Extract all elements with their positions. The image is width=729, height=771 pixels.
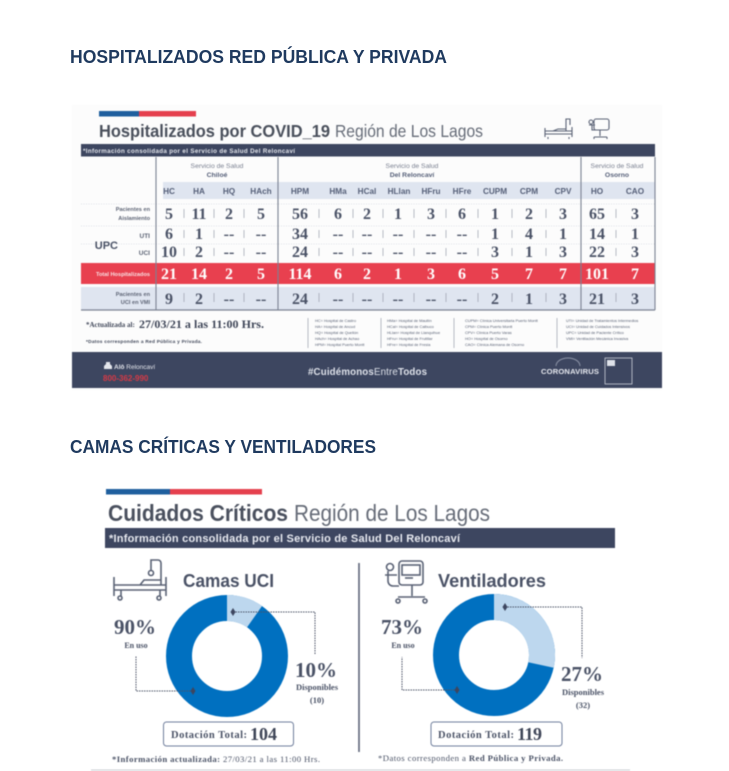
legend: HMa= Hospital de Maullín (387, 318, 432, 323)
values: UTI: -- (333, 226, 343, 243)
legend: HPM= Hospital Puerto Montt (315, 342, 365, 347)
values: UTI: -- (393, 226, 403, 243)
values: UCI: 3 (631, 244, 639, 261)
footer band: Alô Reloncaví (114, 364, 155, 371)
stat: 10% disponibles: (10) (310, 695, 324, 705)
legend: UCI= Unidad de Cuidados Intensivos (566, 324, 630, 329)
row labels: Pacientes en (116, 207, 151, 213)
service headers (191, 163, 644, 179)
column headers: HC (163, 187, 175, 196)
VMI band (81, 287, 655, 310)
stat: 90% en uso: 90% (114, 615, 156, 639)
values: UCI en VMI: -- (256, 291, 266, 308)
column headers: HMa (329, 187, 347, 196)
values: UCI en VMI: 21 (589, 291, 605, 308)
row labels: UCI en VMI (121, 300, 150, 306)
legend: HO= Hospital de Osorno (465, 336, 508, 341)
values: UCI en VMI: -- (333, 291, 343, 308)
values: UCI: 3 (559, 244, 567, 261)
values: pacientes en aislamiento: 3 (559, 206, 567, 223)
values: pacientes en aislamiento: 3 (631, 206, 639, 223)
values: total hospitalizados: 114 (288, 266, 312, 283)
values: UTI: 4 (525, 226, 533, 243)
legend: CUPM= Clínica Universitaria Puerto Montt (465, 318, 539, 323)
stat: 90% en uso: En uso (124, 641, 148, 650)
icon: bed (114, 560, 166, 600)
stat: 27% disponibles (561, 662, 605, 710)
panel title: Hospitalizados por COVID_19Región de Los Lagos (99, 121, 483, 141)
panel title: Cuidados CríticosRegión de Los Lagos (108, 500, 490, 526)
info bar: *Información consolidada por el Servicio de Salud Del Reloncaví (109, 533, 461, 545)
flag stripe (106, 489, 262, 494)
values: UCI (161, 244, 639, 261)
heading: camas UCI: Camas UCI (183, 571, 274, 591)
values: UTI: -- (457, 226, 467, 243)
footer band: #CuidémonosEntreTodos (308, 367, 427, 378)
heading: hospitalizados: HOSPITALIZADOS RED PÚBLICA Y PRIVADA (70, 46, 447, 67)
service headers: Servicio de Salud (191, 163, 244, 170)
values: total hospitalizados: 5 (257, 266, 265, 283)
legend: HA= Hospital de Ancud (315, 324, 355, 329)
values: UCI: -- (362, 244, 372, 261)
values: pacientes en aislamiento: 2 (525, 206, 533, 223)
stat: 73% en uso (381, 615, 423, 650)
panel: hospitalizados table infographic (72, 105, 662, 390)
values: UCI: 10 (161, 244, 177, 261)
row labels: UTI (140, 233, 150, 240)
legend: UPC= Unidad de Paciente Crítico (566, 330, 624, 335)
values: pacientes en aislamiento: 1 (491, 206, 499, 223)
values: UCI en VMI: 9 (165, 291, 173, 308)
values: pacientes en aislamiento: 56 (292, 206, 308, 223)
stat: 10% disponibles: 10% (295, 658, 337, 682)
values: UCI en VMI: -- (426, 291, 436, 308)
heading: camas críticas: CAMAS CRÍTICAS Y VENTILADORES (70, 436, 376, 457)
callout: 90% leader (136, 656, 196, 695)
header band (163, 182, 655, 199)
donut: camas UCI (179, 595, 275, 704)
heading: ventiladores: Ventiladores (438, 571, 546, 591)
values: UTI: 1 (631, 226, 639, 243)
values: pacientes en aislamiento: 5 (165, 206, 173, 223)
values: UCI: -- (457, 244, 467, 261)
column headers: CAO (626, 187, 645, 196)
values: UCI: -- (256, 244, 266, 261)
service headers: Del Reloncaví (390, 172, 435, 179)
values: UTI: 34 (292, 226, 308, 243)
info bar (105, 528, 615, 548)
info bar (81, 144, 655, 156)
flag stripe (99, 111, 196, 116)
column headers: HPM (291, 187, 309, 196)
values: UTI: -- (426, 226, 436, 243)
column headers: HFru (421, 187, 441, 196)
values: UCI: -- (393, 244, 403, 261)
legend: CAO= Clínica Alemana de Osorno (465, 342, 524, 347)
values: total hospitalizados: 6 (458, 266, 466, 283)
values: UCI: 22 (589, 244, 605, 261)
legend: HCal= Hospital de Calbuco (387, 324, 434, 329)
donut: ventiladores (446, 594, 555, 703)
legend: UTI= Unidad de Tratamientos Intermedios (566, 318, 638, 323)
column headers (163, 187, 645, 196)
row labels: UCI (139, 250, 150, 257)
callout: dotación ventiladores: Dotación Total: (438, 730, 514, 741)
footnote: actualizada: *Información actualizada: 27/03/21 a las 11:00 Hrs. (112, 754, 320, 764)
values: UCI en VMI: 1 (525, 291, 533, 308)
values: total hospitalizados: 7 (559, 266, 567, 283)
panel: cuidados críticos infographic (91, 489, 630, 770)
info bar: *Información consolidada por el Servicio de Salud Del Reloncaví (83, 148, 295, 155)
callout: dotación UCI: 104 (250, 724, 277, 744)
callout: dotación ventiladores (431, 722, 562, 746)
values: total hospitalizados: 2 (363, 266, 371, 283)
icon: ventilator small (589, 119, 609, 139)
legend: CPM= Clínica Puerto Montt (465, 324, 513, 329)
callout: 73% leader (402, 657, 460, 694)
service headers: Osorno (605, 172, 629, 179)
values: UCI en VMI: 3 (559, 291, 567, 308)
service headers: Servicio de Salud (591, 163, 644, 170)
values: UCI: 3 (491, 244, 499, 261)
values: pacientes en aislamiento: 2 (225, 206, 233, 223)
values: UTI (165, 226, 639, 243)
service headers: Servicio de Salud (386, 163, 439, 170)
update note: *Actualizada al: (86, 321, 135, 329)
values: pacientes en aislamiento: 11 (191, 206, 207, 223)
values: UCI en VMI: -- (224, 291, 234, 308)
footer band: 800-362-990 (103, 374, 149, 383)
icon: bed small (545, 119, 572, 139)
divider (358, 563, 360, 752)
values: UTI: 6 (165, 226, 173, 243)
stat: 27% disponibles: (32) (576, 700, 590, 710)
values: UCI: 1 (525, 244, 533, 261)
footer band (72, 352, 662, 388)
values: pacientes en aislamiento: 65 (589, 206, 605, 223)
column headers: HA (193, 187, 205, 196)
stat: 27% disponibles: Disponibles (562, 687, 605, 697)
values: UCI: -- (426, 244, 436, 261)
column headers: CPV (555, 187, 572, 196)
values: pacientes en aislamiento: 6 (458, 206, 466, 223)
legend (308, 318, 638, 348)
legend: CPV= Clínica Puerto Varas (465, 330, 512, 335)
values: total hospitalizados: 21 (161, 266, 177, 283)
values: UCI: -- (224, 244, 234, 261)
legend: HLlan= Hospital de Llanquihue (387, 330, 440, 335)
values: UCI: 2 (195, 244, 203, 261)
legend: VMI= Ventilación Mecánica Invasiva (566, 336, 629, 341)
callout: 27% leader (502, 603, 582, 658)
legend: HFru= Hospital de Frutillar (387, 336, 433, 341)
values: total hospitalizados: 6 (334, 266, 342, 283)
values: UCI: 24 (292, 244, 308, 261)
values: total hospitalizados: 101 (585, 266, 609, 283)
stat: 10% disponibles: Disponibles (296, 682, 339, 692)
values: UTI: -- (362, 226, 372, 243)
column headers: HQ (223, 187, 236, 196)
values: pacientes en aislamiento: 1 (394, 206, 402, 223)
values: total hospitalizados (161, 266, 639, 283)
values: total hospitalizados: 7 (525, 266, 533, 283)
service headers: Chiloé (207, 172, 228, 179)
callout: dotación UCI (164, 722, 294, 746)
column headers: HAch (250, 187, 272, 196)
stat: 73% en uso: En uso (391, 641, 415, 650)
values: total hospitalizados: 14 (191, 266, 207, 283)
footer band: CORONAVIRUS (541, 367, 599, 376)
callout: dotación UCI: Dotación Total: (171, 730, 247, 741)
values: pacientes en aislamiento: 3 (427, 206, 435, 223)
update note: *Datos corresponden a Red Pública y Privada. (86, 339, 202, 345)
legend: HAch= Hospital de Achao (315, 336, 359, 341)
values: UCI: -- (333, 244, 343, 261)
column headers: HO (591, 187, 604, 196)
values: total hospitalizados: 3 (427, 266, 435, 283)
values: pacientes en aislamiento: 5 (257, 206, 265, 223)
row labels: UPC (95, 240, 118, 252)
column headers: CUPM (483, 187, 507, 196)
footnote: datos: *Datos corresponden a Red Pública y Privada. (378, 753, 563, 763)
callout: 10% leader (230, 608, 315, 654)
values: total hospitalizados: 1 (394, 266, 402, 283)
row labels: Pacientes en (116, 292, 151, 298)
values: pacientes en aislamiento: 2 (363, 206, 371, 223)
values: pacientes en aislamiento: 6 (334, 206, 342, 223)
values: pacientes en aislamiento (165, 206, 639, 223)
values: UCI en VMI: 2 (491, 291, 499, 308)
values: total hospitalizados: 5 (491, 266, 499, 283)
values: UTI: 1 (559, 226, 567, 243)
callout: dotación ventiladores: 119 (517, 724, 542, 744)
row labels: Aislamiento (118, 216, 151, 222)
stat: 10% disponibles (295, 658, 339, 705)
stat: 90% en uso (114, 615, 156, 650)
values: UCI en VMI: 2 (195, 291, 203, 308)
legend: HFre= Hospital de Fresia (387, 342, 431, 347)
values: UCI en VMI: -- (457, 291, 467, 308)
update note (86, 317, 264, 345)
row labels (95, 207, 151, 306)
row labels: Total Hospitalizados (96, 272, 150, 278)
values: UCI en VMI: 3 (631, 291, 639, 308)
column headers: HCal (358, 187, 376, 196)
legend: HC= Hospital de Castro (315, 318, 356, 323)
separators (184, 209, 616, 302)
values: UCI en VMI (165, 291, 639, 308)
values: UTI: 1 (491, 226, 499, 243)
red total band (81, 263, 655, 284)
stat: 73% en uso: 73% (381, 615, 423, 639)
values: UCI en VMI: 24 (292, 291, 308, 308)
update note: 27/03/21 a las 11:00 Hrs. (139, 317, 264, 331)
values: UTI: 14 (589, 226, 605, 243)
values: UCI en VMI: -- (393, 291, 403, 308)
column headers: HFre (453, 187, 472, 196)
values: total hospitalizados: 2 (225, 266, 233, 283)
legend: HQ= Hospital de Quellón (315, 330, 358, 335)
values: UTI: -- (256, 226, 266, 243)
values: UTI: 1 (195, 226, 203, 243)
icon: ventilator (385, 561, 427, 603)
column headers: HLlan (388, 187, 410, 196)
values: total hospitalizados: 7 (631, 266, 639, 283)
values: UCI en VMI: -- (362, 291, 372, 308)
stat: 27% disponibles: 27% (561, 662, 603, 686)
column headers: CPM (520, 187, 538, 196)
values: UTI: -- (224, 226, 234, 243)
